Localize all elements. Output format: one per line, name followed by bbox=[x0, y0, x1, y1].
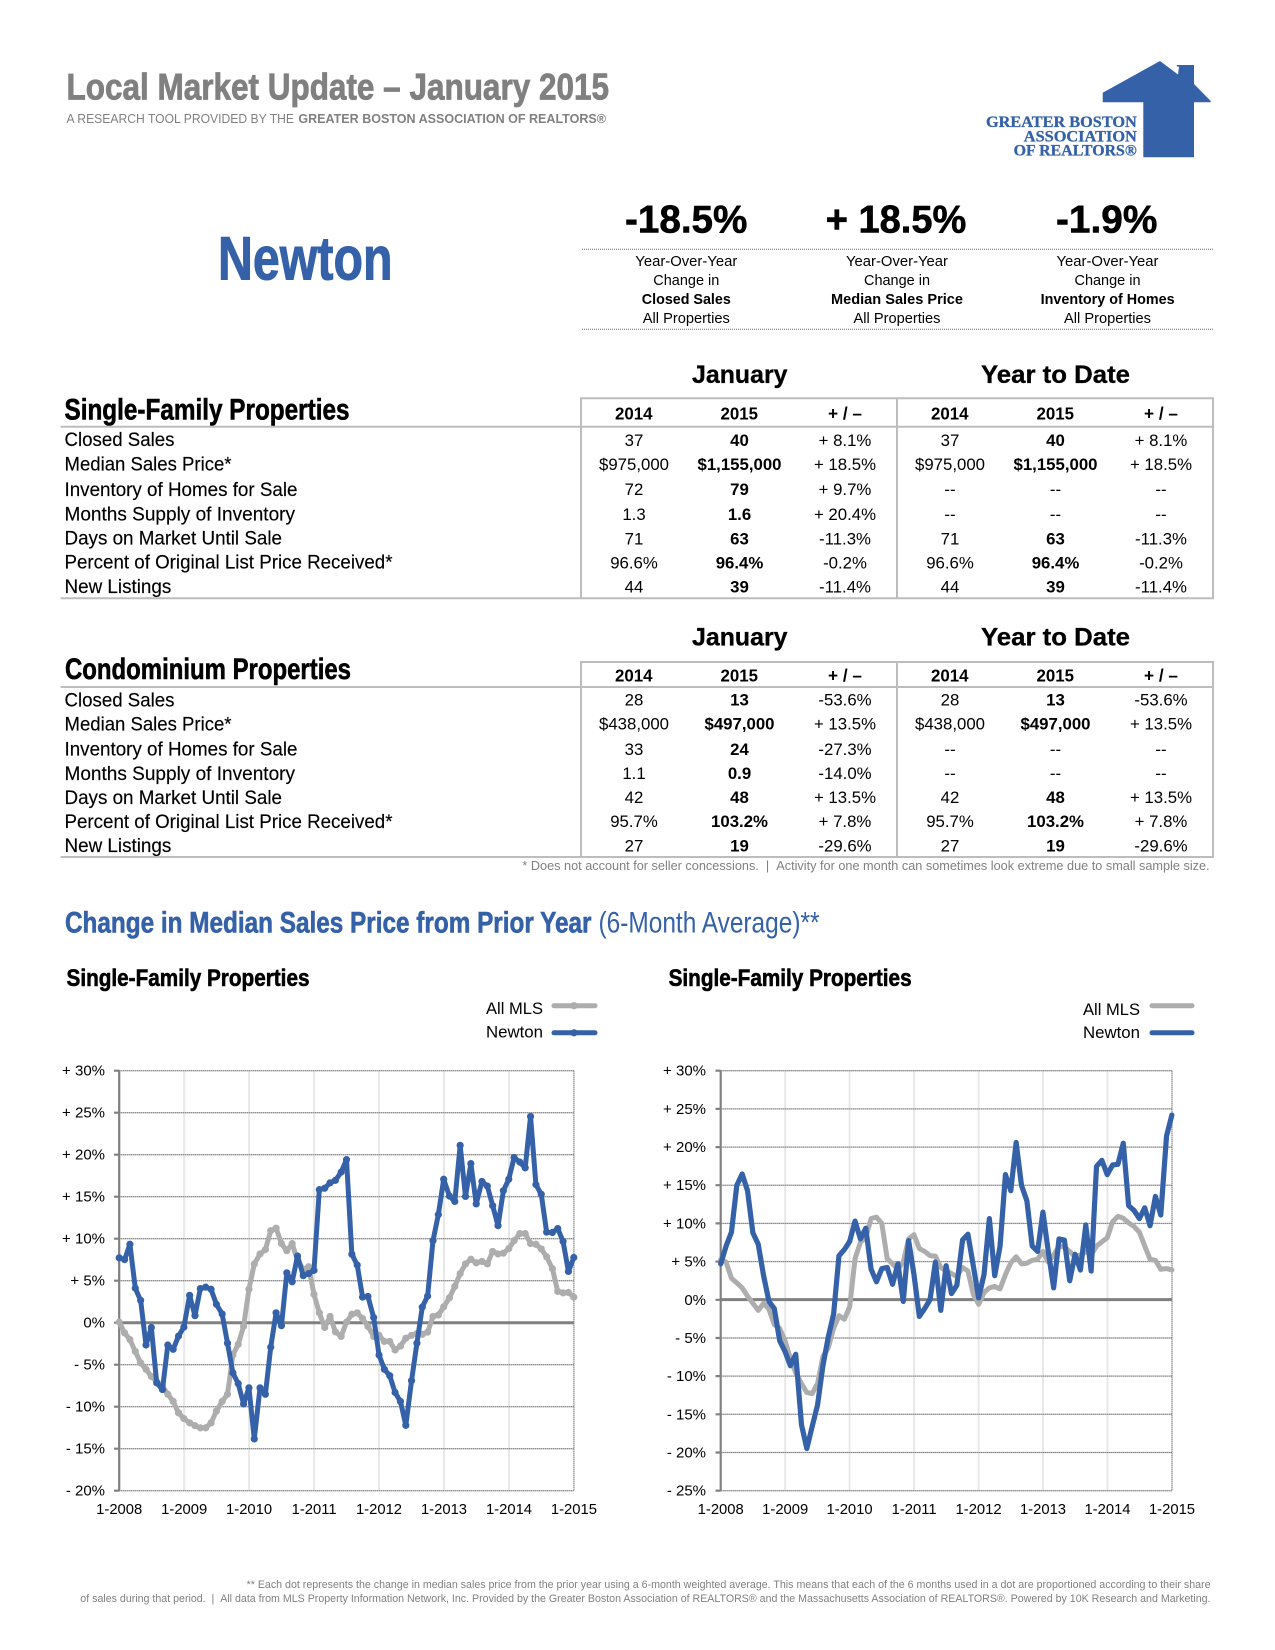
icon: house bbox=[1103, 61, 1211, 157]
row: percent of list price: 95.7% bbox=[926, 812, 974, 831]
row: closed sales: Closed Sales bbox=[64, 429, 175, 451]
metric: inventory of homes: -1.9% bbox=[1056, 199, 1157, 242]
row: inventory: -- bbox=[944, 480, 956, 499]
metric: closed sales: Change in bbox=[653, 273, 719, 289]
row: days on market bbox=[64, 528, 1187, 550]
x axis labels: 1-2010 bbox=[827, 1502, 873, 1518]
logo text: OF REALTORS® bbox=[1014, 143, 1137, 160]
row: percent of list price: -0.2% bbox=[823, 553, 867, 572]
row: inventory bbox=[64, 479, 1167, 501]
metric: closed sales: -18.5% bbox=[625, 199, 747, 242]
row: inventory: 24 bbox=[730, 740, 749, 759]
row: median sales price: + 13.5% bbox=[1130, 715, 1192, 734]
row: months supply: 1.6 bbox=[728, 505, 751, 524]
y axis labels: - 20% bbox=[66, 1483, 105, 1500]
y axis labels: - 5% bbox=[675, 1330, 706, 1347]
row: median sales price: + 18.5% bbox=[814, 455, 876, 474]
row: percent of list price: + 7.8% bbox=[819, 812, 871, 831]
row: new listings: -11.4% bbox=[1135, 578, 1187, 597]
logo text: GREATER BOSTON bbox=[986, 114, 1138, 131]
column headers: 2014 bbox=[931, 665, 969, 685]
x axis labels: 1-2009 bbox=[762, 1502, 808, 1518]
row: months supply: 1.1 bbox=[622, 764, 646, 783]
row: new listings: 39 bbox=[1046, 578, 1065, 597]
table footnote: * Does not account for seller concessions. | Activity for one month can sometimes look extreme due to small sample size. bbox=[522, 859, 1210, 873]
y axis labels: + 5% bbox=[70, 1273, 105, 1290]
row: inventory: -- bbox=[944, 740, 956, 759]
y axis labels: 0% bbox=[83, 1315, 105, 1332]
row: new listings: New Listings bbox=[64, 576, 172, 598]
panel: left chart bbox=[62, 965, 597, 1518]
x axis labels: 1-2014 bbox=[1084, 1502, 1131, 1518]
row: new listings bbox=[64, 576, 1187, 598]
row: median sales price: $438,000 bbox=[599, 715, 669, 734]
row: percent of list price: 96.4% bbox=[716, 553, 763, 572]
row: median sales price: Median Sales Price* bbox=[64, 714, 232, 736]
x axis labels: 1-2012 bbox=[356, 1502, 402, 1518]
row: median sales price: $1,155,000 bbox=[1014, 455, 1098, 474]
row: percent of list price: 96.6% bbox=[610, 553, 658, 572]
row: months supply: 0.9 bbox=[728, 764, 751, 783]
line: All MLS bbox=[721, 1216, 1172, 1394]
heading: January: January bbox=[692, 624, 788, 652]
subtitle: A RESEARCH TOOL PROVIDED BY THE bbox=[66, 111, 294, 126]
row: closed sales: 37 bbox=[625, 431, 643, 450]
column headers: 2015 bbox=[1036, 403, 1074, 423]
row: new listings: -29.6% bbox=[1134, 837, 1188, 856]
row: days on market: 63 bbox=[730, 529, 749, 548]
row: median sales price: $497,000 bbox=[1020, 715, 1090, 734]
y axis labels: - 5% bbox=[74, 1357, 105, 1374]
row: new listings: 27 bbox=[941, 837, 959, 856]
row: percent of list price: -0.2% bbox=[1139, 553, 1183, 572]
row: closed sales: 40 bbox=[1046, 431, 1065, 450]
row: days on market: 71 bbox=[625, 529, 643, 548]
row: closed sales: 28 bbox=[941, 691, 959, 710]
row: median sales price: $975,000 bbox=[915, 455, 985, 474]
subtitle bbox=[66, 111, 606, 126]
row: closed sales bbox=[64, 690, 1188, 712]
row: days on market: + 13.5% bbox=[1130, 788, 1192, 807]
y axis labels: - 10% bbox=[667, 1368, 706, 1385]
row: days on market: -11.3% bbox=[819, 529, 871, 548]
header: title block bbox=[66, 66, 609, 126]
column headers: 2014 bbox=[615, 665, 653, 685]
y axis labels: + 20% bbox=[663, 1139, 706, 1156]
metric: closed sales: All Properties bbox=[643, 311, 730, 327]
row: inventory: Inventory of Homes for Sale bbox=[64, 738, 298, 760]
y axis labels: - 20% bbox=[667, 1444, 706, 1462]
row: closed sales: -53.6% bbox=[1134, 691, 1188, 710]
row: months supply: -- bbox=[1155, 505, 1167, 524]
row: new listings: -11.4% bbox=[819, 578, 871, 597]
row: months supply: Months Supply of Inventory bbox=[64, 763, 295, 785]
row: months supply: -- bbox=[1050, 764, 1061, 783]
section heading: change in median sales price: Change in Median Sales Price from Prior Year bbox=[65, 906, 592, 939]
row: inventory: -- bbox=[1155, 740, 1167, 759]
row: inventory bbox=[64, 738, 1167, 760]
y axis labels: 0% bbox=[684, 1292, 706, 1309]
panel: condominium table bbox=[61, 624, 1214, 857]
row: months supply: -- bbox=[1050, 505, 1061, 524]
x axis labels: 1-2015 bbox=[551, 1502, 597, 1518]
row: days on market: 42 bbox=[625, 788, 643, 807]
row: closed sales: 13 bbox=[730, 691, 749, 710]
y axis labels: + 30% bbox=[663, 1063, 706, 1080]
metric: closed sales: Year-Over-Year bbox=[635, 254, 737, 270]
column headers bbox=[615, 403, 1178, 423]
row: days on market: Days on Market Until Sale bbox=[64, 787, 282, 809]
row: days on market: + 13.5% bbox=[814, 788, 876, 807]
row: inventory: -27.3% bbox=[818, 740, 872, 759]
row: inventory: 79 bbox=[730, 480, 749, 499]
row: days on market: Days on Market Until Sale bbox=[64, 528, 282, 550]
legend: All MLS bbox=[486, 1000, 543, 1018]
x axis labels: 1-2009 bbox=[161, 1502, 207, 1518]
metric: closed sales: Closed Sales bbox=[642, 292, 731, 308]
row: median sales price bbox=[64, 714, 1192, 736]
row: percent of list price bbox=[64, 811, 1187, 833]
row: months supply bbox=[64, 763, 1167, 785]
row: new listings: -29.6% bbox=[818, 837, 872, 856]
y axis labels: + 25% bbox=[62, 1105, 105, 1122]
column headers: 2014 bbox=[615, 403, 653, 423]
row: inventory: 72 bbox=[625, 480, 643, 499]
metric: inventory of homes: Year-Over-Year bbox=[1056, 254, 1159, 270]
title: Local Market Update – January 2015 bbox=[66, 66, 609, 107]
row: months supply: Months Supply of Inventory bbox=[64, 504, 295, 526]
x axis labels: 1-2012 bbox=[956, 1502, 1002, 1518]
row: closed sales bbox=[64, 429, 1187, 451]
row: new listings: New Listings bbox=[64, 835, 172, 857]
heading: Single-Family Properties: Single-Family Properties bbox=[64, 393, 350, 426]
row: inventory: -- bbox=[1050, 740, 1061, 759]
row: percent of list price: + 7.8% bbox=[1135, 812, 1187, 831]
row: months supply bbox=[64, 504, 1167, 526]
row: new listings: 44 bbox=[941, 578, 959, 597]
row: closed sales: 40 bbox=[730, 431, 749, 450]
row: percent of list price: 96.6% bbox=[926, 553, 974, 572]
row: percent of list price: Percent of Original List Price Received* bbox=[64, 552, 393, 574]
metric: inventory of homes bbox=[1041, 199, 1175, 327]
row: months supply: -14.0% bbox=[818, 764, 872, 783]
x axis labels: 1-2013 bbox=[421, 1502, 467, 1518]
heading: Condominium Properties: Condominium Properties bbox=[65, 653, 351, 686]
row: days on market: 48 bbox=[730, 788, 749, 807]
chart grid and axes bbox=[716, 1071, 1172, 1491]
heading: January: January bbox=[692, 361, 788, 389]
row: percent of list price: 103.2% bbox=[1027, 812, 1084, 831]
row: median sales price: $497,000 bbox=[704, 715, 774, 734]
panel: single-family table bbox=[61, 361, 1214, 598]
logo text bbox=[986, 114, 1138, 160]
metric: median sales price: All Properties bbox=[854, 311, 940, 327]
metric: median sales price: + 18.5% bbox=[826, 199, 966, 242]
column headers: 2015 bbox=[720, 403, 758, 423]
x axis labels: 1-2010 bbox=[226, 1502, 272, 1518]
row: median sales price: Median Sales Price* bbox=[64, 454, 232, 476]
panel: key metrics bbox=[582, 199, 1213, 329]
row: percent of list price: 95.7% bbox=[610, 812, 658, 831]
metric: median sales price bbox=[826, 199, 966, 327]
row: inventory: -- bbox=[1050, 480, 1061, 499]
row: median sales price bbox=[64, 454, 1192, 476]
metric: median sales price: Change in bbox=[864, 273, 930, 289]
row: days on market bbox=[64, 787, 1192, 809]
y axis labels: - 15% bbox=[66, 1441, 105, 1458]
subtitle: GREATER BOSTON ASSOCIATION OF REALTORS® bbox=[298, 111, 606, 126]
x axis labels: 1-2013 bbox=[1020, 1502, 1066, 1518]
row: new listings: 19 bbox=[1046, 837, 1065, 856]
row: closed sales: Closed Sales bbox=[64, 690, 175, 712]
row: closed sales: 37 bbox=[941, 431, 959, 450]
metric: inventory of homes: All Properties bbox=[1064, 311, 1151, 327]
footer note bbox=[80, 1579, 1211, 1605]
x axis labels: 1-2015 bbox=[1149, 1502, 1195, 1518]
y axis labels: - 10% bbox=[66, 1399, 105, 1416]
legend: Newton bbox=[486, 1024, 543, 1042]
section heading: change in median sales price: (6-Month Average)** bbox=[598, 906, 820, 939]
y axis labels: + 10% bbox=[663, 1215, 706, 1232]
row: months supply: + 20.4% bbox=[814, 505, 876, 524]
y axis labels bbox=[62, 1063, 105, 1500]
row: closed sales: 28 bbox=[625, 691, 643, 710]
row: closed sales: 13 bbox=[1046, 691, 1065, 710]
x axis labels bbox=[698, 1502, 1195, 1518]
line: All MLS bbox=[119, 1228, 574, 1428]
panel: right chart bbox=[663, 965, 1195, 1518]
heading: Year to Date: Year to Date bbox=[981, 361, 1130, 389]
row: percent of list price bbox=[64, 552, 1183, 574]
metric: median sales price: Year-Over-Year bbox=[846, 254, 948, 270]
legend bbox=[486, 1000, 595, 1042]
column headers: + / – bbox=[828, 665, 862, 685]
row: percent of list price: 96.4% bbox=[1032, 553, 1079, 572]
row: median sales price: $1,155,000 bbox=[698, 455, 782, 474]
row: days on market: -11.3% bbox=[1135, 529, 1187, 548]
column headers: + / – bbox=[1144, 403, 1178, 423]
line: Newton bbox=[119, 1116, 574, 1439]
metric: inventory of homes: Change in bbox=[1074, 273, 1140, 289]
heading: Year to Date: Year to Date bbox=[981, 624, 1130, 652]
chart heading: Single-Family Properties bbox=[669, 965, 912, 992]
column headers: 2015 bbox=[720, 665, 758, 685]
row: inventory: 33 bbox=[625, 740, 643, 759]
row: new listings: 44 bbox=[625, 578, 643, 597]
logo: Greater Boston Association of Realtors bbox=[986, 61, 1211, 160]
y axis labels bbox=[663, 1063, 706, 1500]
chart heading: Single-Family Properties bbox=[66, 965, 310, 992]
row: median sales price: $438,000 bbox=[915, 715, 985, 734]
row: days on market: 48 bbox=[1046, 788, 1065, 807]
logo text: ASSOCIATION bbox=[1024, 129, 1138, 146]
footer note: of sales during that period. | All data from MLS Property Information Network, Inc. Provided by the Greater Boston Association of REALTORS® and the Massachusetts Association of REALTORS®. Powered by 10K Research and Marketing. bbox=[80, 1593, 1210, 1605]
row: closed sales: + 8.1% bbox=[1135, 431, 1187, 450]
row: inventory: -- bbox=[1155, 480, 1167, 499]
row: days on market: 42 bbox=[941, 788, 959, 807]
y axis labels: - 25% bbox=[667, 1483, 706, 1500]
y axis labels: + 15% bbox=[663, 1177, 706, 1194]
line: Newton bbox=[721, 1115, 1172, 1449]
x axis labels: 1-2014 bbox=[486, 1502, 532, 1518]
footer note: ** Each dot represents the change in median sales price from the prior year using a 6-month weighted average. This means that each of the 6 months used in a dot are proportioned according to their share bbox=[247, 1579, 1211, 1591]
row: percent of list price: 103.2% bbox=[711, 812, 768, 831]
column headers bbox=[615, 665, 1178, 685]
row: median sales price: $975,000 bbox=[599, 455, 669, 474]
column headers: 2014 bbox=[931, 403, 969, 423]
x axis labels: 1-2011 bbox=[292, 1502, 337, 1518]
legend: Newton bbox=[1083, 1024, 1140, 1042]
column headers: + / – bbox=[828, 403, 862, 423]
x axis labels: 1-2008 bbox=[96, 1502, 142, 1518]
row: closed sales: -53.6% bbox=[818, 691, 872, 710]
metric: median sales price: Median Sales Price bbox=[831, 292, 963, 308]
row: new listings: 27 bbox=[625, 837, 643, 856]
y axis labels: + 15% bbox=[62, 1189, 105, 1206]
y axis labels: + 5% bbox=[671, 1254, 706, 1271]
row: months supply: -- bbox=[1155, 764, 1167, 783]
row: new listings bbox=[64, 835, 1188, 857]
row: inventory: Inventory of Homes for Sale bbox=[64, 479, 298, 501]
row: median sales price: + 18.5% bbox=[1130, 455, 1192, 474]
metric: inventory of homes: Inventory of Homes bbox=[1041, 292, 1175, 308]
town name: Newton bbox=[218, 224, 392, 292]
y axis labels: + 25% bbox=[663, 1101, 706, 1118]
row: months supply: 1.3 bbox=[622, 505, 646, 524]
row: percent of list price: Percent of Original List Price Received* bbox=[64, 811, 393, 833]
row: inventory: + 9.7% bbox=[819, 480, 871, 499]
metric: closed sales bbox=[625, 199, 747, 327]
row: closed sales: + 8.1% bbox=[819, 431, 871, 450]
row: months supply: -- bbox=[944, 764, 956, 783]
column headers: 2015 bbox=[1036, 665, 1074, 685]
x axis labels bbox=[96, 1502, 597, 1518]
y axis labels: + 20% bbox=[62, 1147, 105, 1164]
y axis labels: - 15% bbox=[667, 1406, 706, 1423]
chart grid and axes bbox=[114, 1071, 574, 1491]
row: days on market: 63 bbox=[1046, 529, 1065, 548]
x axis labels: 1-2011 bbox=[892, 1502, 937, 1518]
column headers: + / – bbox=[1144, 665, 1178, 685]
y axis labels: + 10% bbox=[62, 1231, 105, 1248]
y axis labels: + 30% bbox=[62, 1063, 105, 1080]
row: new listings: 39 bbox=[730, 578, 749, 597]
x axis labels: 1-2008 bbox=[698, 1502, 744, 1518]
row: median sales price: + 13.5% bbox=[814, 715, 876, 734]
row: months supply: -- bbox=[944, 505, 956, 524]
legend bbox=[1083, 1001, 1192, 1042]
legend: All MLS bbox=[1083, 1001, 1140, 1019]
row: new listings: 19 bbox=[730, 837, 749, 856]
row: days on market: 71 bbox=[941, 529, 959, 548]
